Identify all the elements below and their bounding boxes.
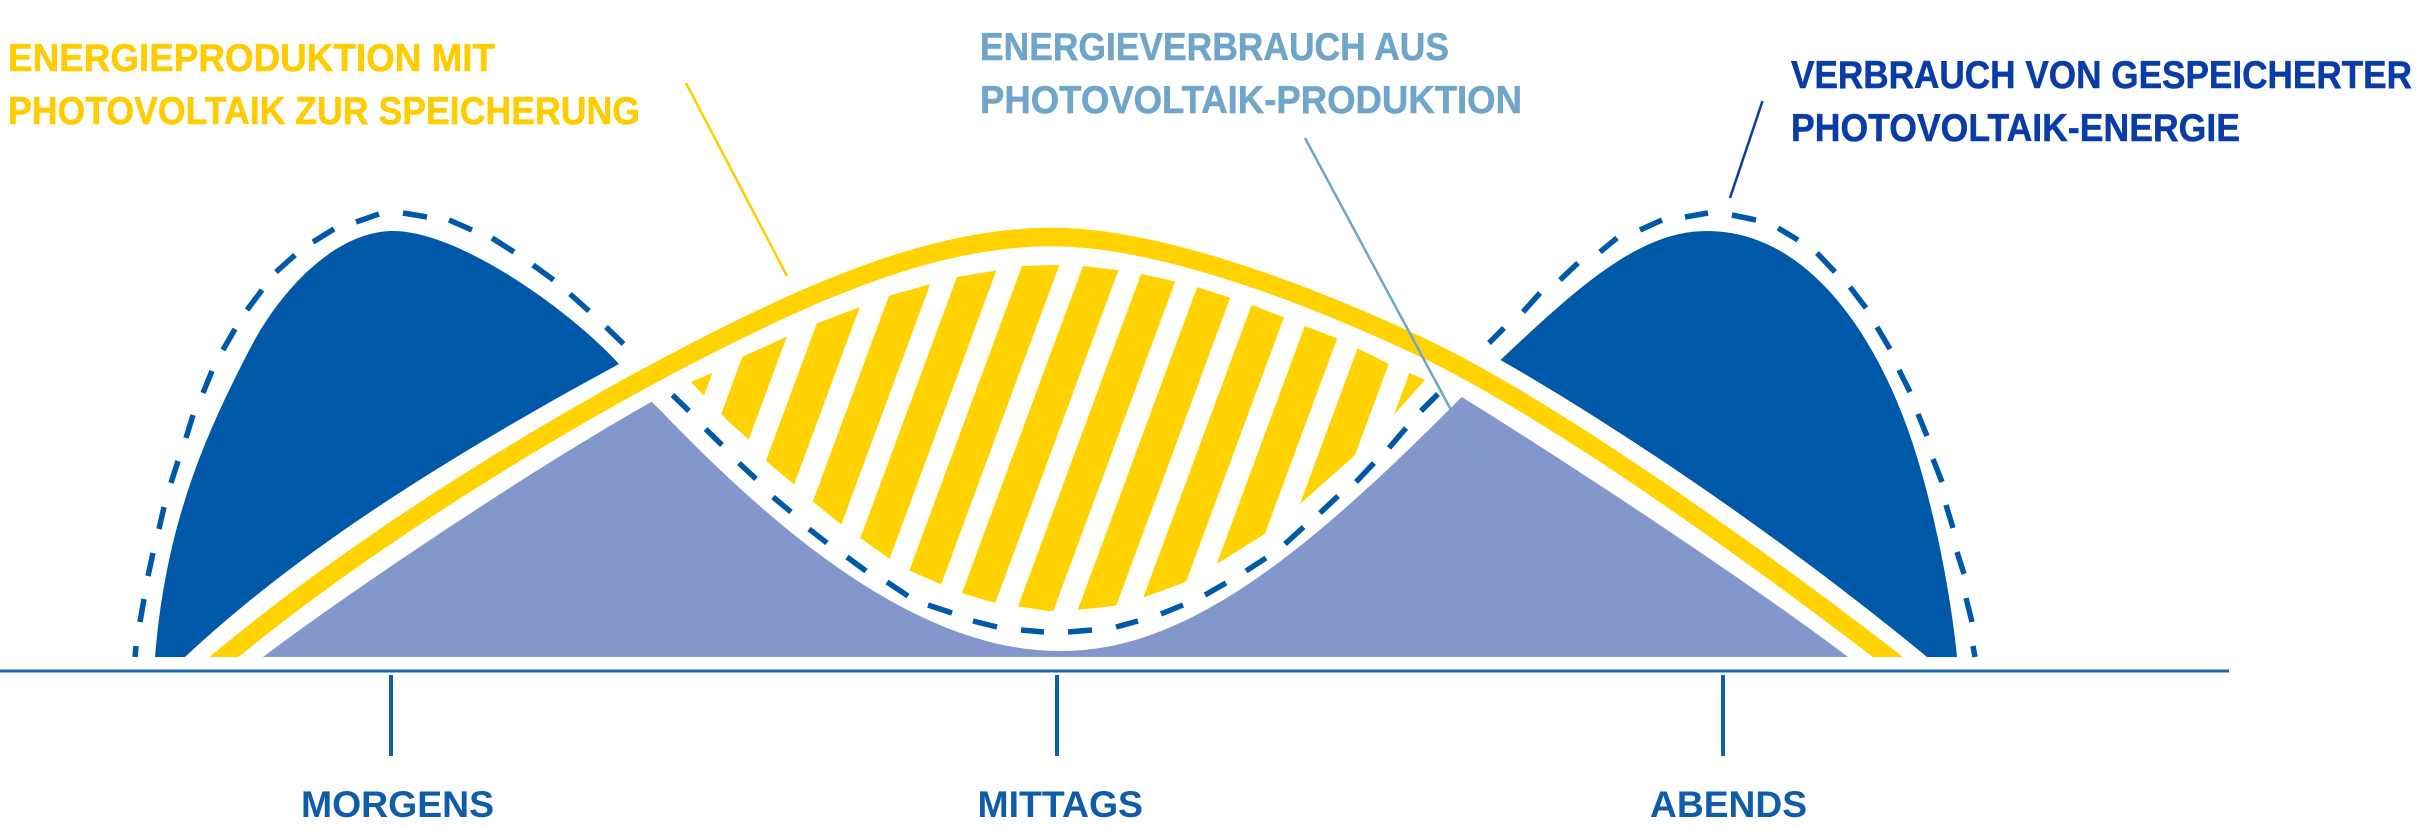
heading: stored consumption [1791,54,2412,150]
callout line: production [686,83,787,276]
heading: production for storage: PHOTOVOLTAIK ZUR SPEICHERUNG [8,90,640,133]
heading: direct consumption [980,26,1522,122]
heading: production for storage: ENERGIEPRODUKTION MIT [8,37,495,80]
label: evening: ABENDS [1650,783,1807,825]
direct consumption area [263,397,1848,657]
tick: morning [389,675,393,756]
heading: production for storage [8,37,640,133]
hatched stored production area [691,265,1425,611]
total photovoltaic production band [210,237,1902,668]
tick: evening [1721,675,1725,756]
dashed outline: evening [1489,213,1975,657]
dashed outline: morning [135,213,624,657]
heading: stored consumption: PHOTOVOLTAIK-ENERGIE [1791,107,2240,150]
heading: direct consumption: PHOTOVOLTAIK-PRODUKTION [980,79,1522,122]
callout line: direct consumption [1305,138,1480,463]
time axis [0,670,2229,672]
label: midday: MITTAGS [978,783,1143,825]
tick: midday [1055,675,1059,756]
label: morning: MORGENS [301,783,494,825]
evening stored energy dome [1500,231,1957,657]
heading: direct consumption: ENERGIEVERBRAUCH AUS [980,26,1449,69]
callout line: stored consumption [1730,101,1762,198]
morning stored energy dome [155,231,619,657]
dashed outline: midday valley [672,394,1438,632]
